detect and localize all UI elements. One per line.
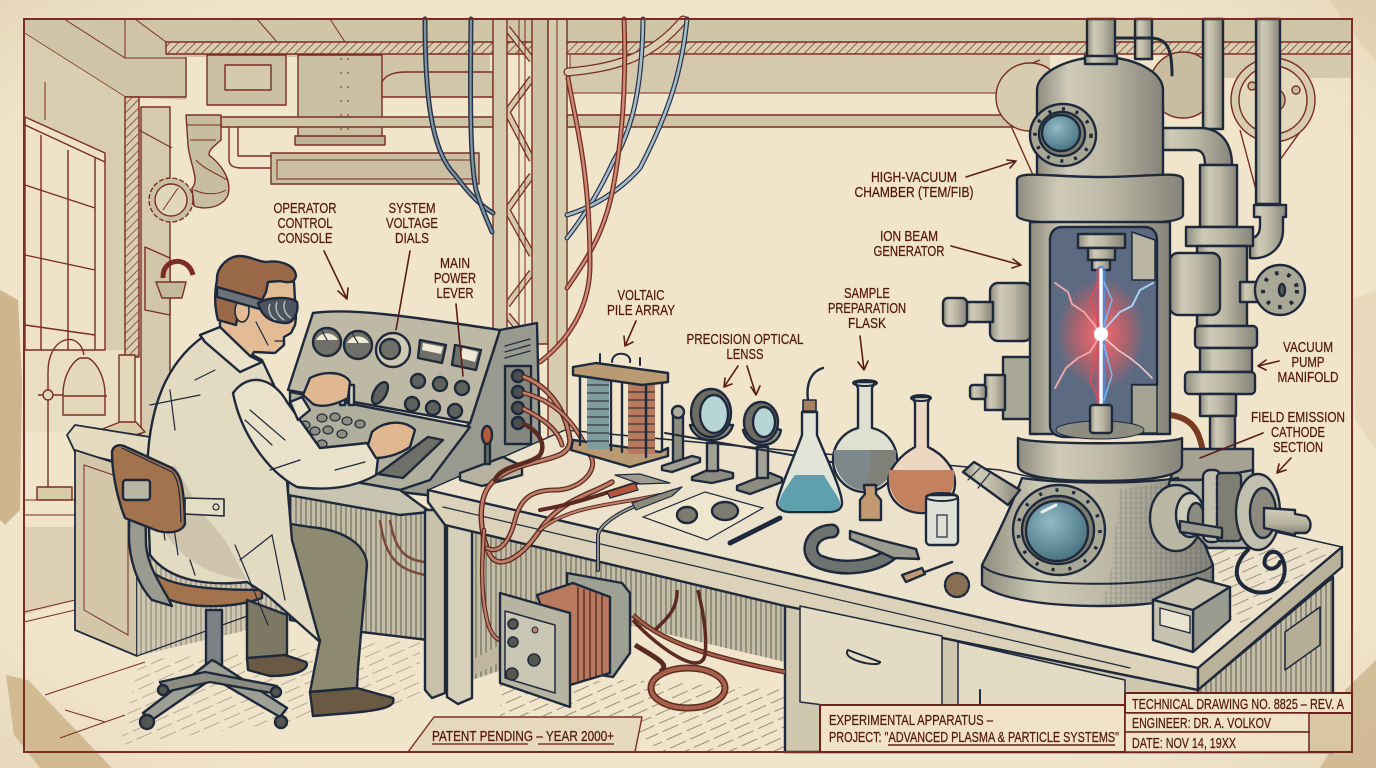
- chair back and support: [112, 445, 185, 606]
- side duct to truss: [382, 72, 493, 97]
- transformer power supply: [500, 573, 630, 707]
- bench top surface: [428, 430, 1342, 668]
- drawer cabinet: [785, 606, 1198, 752]
- label: voltaic pile array: PILE ARRAY: [607, 303, 675, 319]
- label: voltaic pile array: VOLTAIC: [618, 288, 664, 304]
- ear: [235, 300, 249, 322]
- lower control deck: [290, 392, 470, 490]
- wall-mounted arc instrument: [145, 247, 193, 315]
- label: vacuum pump manifold: [1258, 340, 1338, 386]
- lower flange: [1018, 438, 1182, 481]
- pen: [730, 518, 780, 543]
- steel truss: [493, 19, 567, 444]
- slanted instrument panel: [288, 311, 500, 423]
- label: sample preparation flask: [828, 286, 906, 370]
- system voltage dial: [376, 333, 410, 367]
- label: high-vacuum chamber: HIGH-VACUUM: [871, 170, 957, 186]
- patent pending stamp: [408, 717, 642, 752]
- hair: [215, 256, 296, 325]
- project title block: [820, 705, 1125, 752]
- trousers: [265, 520, 367, 692]
- round flask grey: [833, 380, 897, 492]
- label: operator control console: CONTROL: [278, 216, 332, 232]
- label: field emission cathode section: CATHODE: [1271, 425, 1325, 441]
- hatching on bench top: [1205, 545, 1335, 626]
- pulleys and belts: [996, 52, 1315, 190]
- plasma arc and lightning: [1055, 270, 1153, 405]
- top pipe and dome: [1037, 19, 1172, 180]
- project title block: EXPERIMENTAL APPARATUS –: [829, 713, 994, 729]
- background: ceiling, ducts and beams: [24, 19, 1352, 622]
- coat arm: [233, 380, 378, 489]
- back desk: [67, 425, 300, 656]
- red cables: [481, 377, 660, 642]
- ion beam generator electrode: [1078, 234, 1125, 270]
- precision optical lenses: [662, 389, 782, 494]
- left side ports: [943, 283, 1032, 419]
- patent pending stamp: PATENT PENDING – YEAR 2000+: [432, 729, 614, 745]
- label: ion beam generator: GENERATOR: [874, 244, 944, 260]
- vacuum pump manifold: [1150, 19, 1305, 480]
- label: operator control console: CONSOLE: [278, 231, 333, 247]
- label: system voltage dials: VOLTAGE: [386, 216, 438, 232]
- bench legs: [425, 510, 445, 698]
- long wall heater box: [229, 127, 479, 184]
- angled nozzle: [963, 462, 1020, 505]
- small post stand: [662, 406, 700, 472]
- joystick lever: [460, 426, 522, 486]
- micrometer: [811, 531, 919, 567]
- main upper flange: [1017, 175, 1183, 224]
- technical drawing info block: DATE: NOV 14, 19XX: [1132, 736, 1236, 752]
- rear leg and shoe: [247, 600, 307, 676]
- coiled hook below wheel: [1237, 550, 1285, 592]
- upper porthole: [1030, 104, 1096, 166]
- hatched roof beam: [166, 42, 1352, 54]
- label: vacuum pump manifold: VACUUM: [1283, 340, 1333, 356]
- neck and face: [220, 278, 296, 358]
- lens one: [690, 389, 733, 483]
- label: precision optical lens: LENSS: [726, 347, 764, 363]
- floor cable coil: [633, 590, 785, 708]
- label: main power lever: POWER: [434, 271, 476, 287]
- floor hatching: [45, 640, 785, 752]
- hands: [290, 373, 415, 458]
- pressure gauge: [149, 178, 193, 222]
- label: sample preparation flask: SAMPLE: [844, 286, 890, 302]
- lower porthole: [1013, 485, 1105, 575]
- label: precision optical lens: [686, 332, 804, 395]
- main workbench: [425, 430, 1342, 752]
- horizontal pipes: [221, 115, 1040, 127]
- label: high-vacuum chamber: CHAMBER (TEM/FIB): [854, 185, 974, 201]
- schematic paper with washers: [643, 492, 763, 540]
- bench front edge: [428, 490, 1198, 690]
- label: operator control console: OPERATOR: [274, 201, 336, 217]
- overhead power cables: [425, 19, 687, 362]
- shirt collar: [200, 327, 262, 372]
- round flask copper: [888, 395, 955, 513]
- project title block: PROJECT: "ADVANCED PLASMA & PARTICLE SYSTEMS": [829, 730, 1119, 746]
- side vents and sockets: [505, 339, 531, 444]
- button matrix: [300, 413, 365, 448]
- label: vacuum pump manifold: MANIFOLD: [1278, 370, 1338, 386]
- glass beaker: [926, 493, 958, 545]
- analog gauges: [313, 328, 372, 359]
- label: operator control console: [274, 201, 348, 299]
- conical flask with blue liquid: [777, 368, 842, 512]
- cone cross-hatch shading: [1100, 480, 1213, 606]
- label: sample preparation flask: FLASK: [848, 316, 886, 332]
- flexible duct elbow: [186, 115, 229, 208]
- rectangular meters: [418, 340, 481, 370]
- label: field emission cathode section: [1200, 410, 1345, 473]
- label: system voltage dials: SYSTEM: [388, 201, 436, 217]
- operator control console: [288, 311, 540, 515]
- front shoe: [310, 688, 393, 716]
- console base: [290, 480, 428, 640]
- label: main power lever: [434, 256, 476, 376]
- label: field emission cathode section: SECTION: [1273, 440, 1323, 456]
- console side panel: [400, 323, 540, 500]
- label: precision optical lens: PRECISION OPTICAL: [686, 332, 804, 348]
- lab coat body: [147, 332, 320, 642]
- chair seat: [147, 566, 262, 606]
- operator figure: [147, 256, 415, 716]
- lower cone base: [982, 478, 1213, 606]
- cabinet side panel: [1198, 577, 1333, 752]
- label: main power lever: LEVER: [436, 286, 474, 302]
- label: voltaic pile array: [607, 288, 675, 346]
- label: field emission cathode section: FIELD EMISSION: [1251, 410, 1345, 426]
- high-vacuum chamber: [943, 19, 1310, 606]
- bench ribbed back panel: [472, 527, 785, 680]
- safety goggles: [217, 287, 297, 323]
- label: main power lever: MAIN: [440, 256, 470, 272]
- chair star base: [140, 610, 287, 729]
- label: ion beam generator: ION BEAM: [880, 229, 938, 245]
- small reagent bottle: [860, 485, 881, 520]
- switches and knobs: [340, 374, 469, 418]
- label: system voltage dials: DIALS: [395, 231, 429, 247]
- slider lever: [378, 437, 443, 478]
- annotation labels and arrows: [274, 160, 1345, 473]
- label: ion beam generator: [874, 229, 1021, 268]
- wall and window: [24, 33, 172, 622]
- ductwork box with plate: [207, 55, 286, 105]
- faint distillation glassware on back desk: [37, 340, 145, 500]
- bench right side: [1198, 547, 1342, 690]
- riveted vertical duct: [295, 55, 385, 145]
- small panel meter: [1153, 578, 1230, 652]
- voltaic pile array: [571, 354, 668, 467]
- label: system voltage dials: [386, 201, 438, 330]
- lens two: [737, 402, 782, 494]
- label: vacuum pump manifold: PUMP: [1292, 355, 1324, 371]
- back edge of bench: [665, 433, 837, 463]
- chamber body: [1030, 222, 1170, 434]
- technical drawing info block: [1125, 693, 1352, 752]
- label: sample preparation flask: PREPARATION: [828, 301, 906, 317]
- field emission cathode tip: [1056, 405, 1144, 439]
- office chair base and seat: [140, 566, 287, 729]
- coat belt: [185, 498, 224, 516]
- small tool and gear: [902, 562, 969, 597]
- right gear and shaft assembly: [1150, 470, 1310, 551]
- probes on bench: [607, 474, 682, 510]
- technical drawing info block: ENGINEER: DR. A. VOLKOV: [1132, 716, 1271, 732]
- label: high-vacuum chamber: [854, 160, 1016, 201]
- cutaway viewing window: [1050, 227, 1157, 437]
